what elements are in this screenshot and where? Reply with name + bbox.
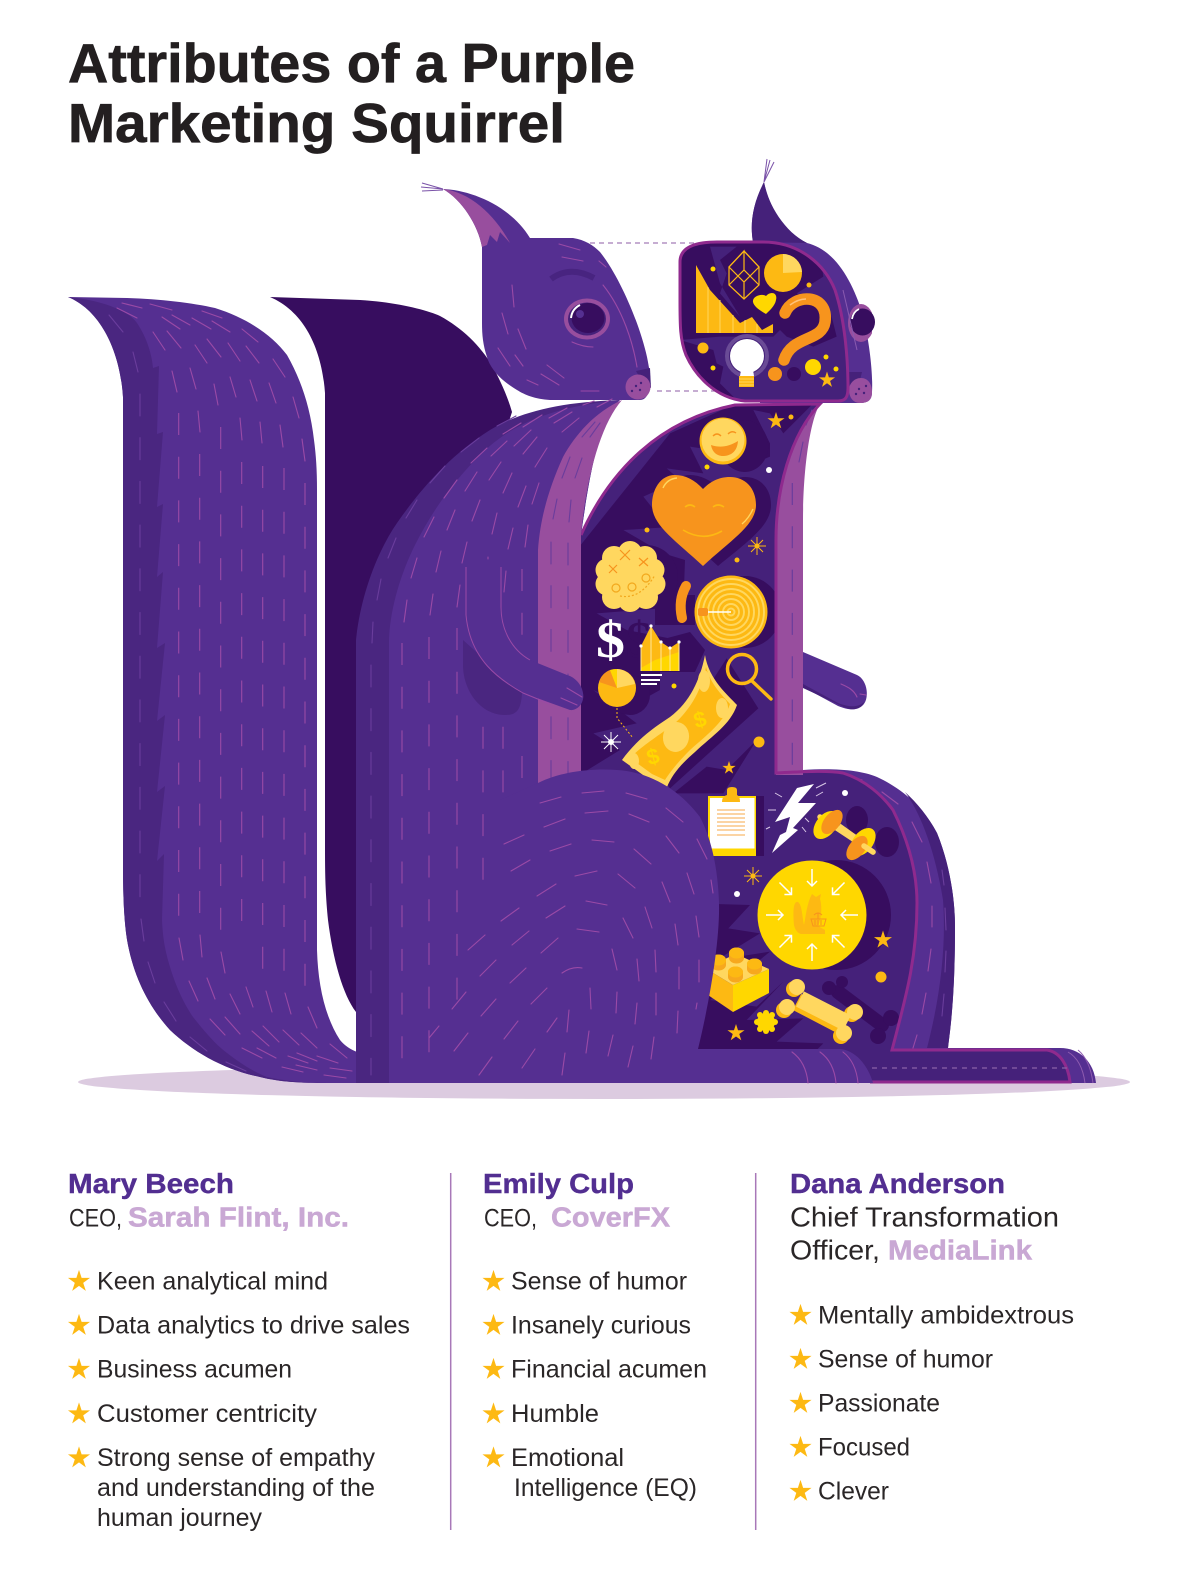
- panel: Mary Beech: Business acumen: [97, 1356, 292, 1384]
- panel: Dana Anderson: MediaLink: [888, 1234, 1032, 1266]
- panel: Mary Beech: human journey: [97, 1504, 262, 1532]
- title: Attributes of a Purple: [68, 32, 635, 94]
- left head fur: [498, 244, 637, 407]
- panel: Emily Culp: Insanely curious: [511, 1312, 691, 1340]
- icon: dumbbell: [808, 806, 881, 864]
- guide lines between heads: [590, 243, 846, 391]
- bone shadow: [838, 992, 882, 1025]
- icon: starburst: [748, 537, 766, 555]
- panel: Dana Anderson: Clever: [818, 1478, 889, 1506]
- right nose: [849, 372, 872, 403]
- interior outline: [581, 404, 1070, 1082]
- cutaway interior: neck and body: [577, 403, 1070, 1083]
- dividers: [451, 1173, 756, 1530]
- panel: Mary Beech: and understanding of the: [97, 1474, 375, 1502]
- right arm: [803, 652, 867, 709]
- back tail: [270, 297, 512, 1012]
- panel: Mary Beech: Sarah Flint, Inc.: [128, 1202, 349, 1232]
- icon: target with arrow: [681, 576, 768, 648]
- right body fur: [842, 774, 932, 1048]
- icon: small stars and dots, neck: [644, 412, 794, 774]
- icon: area chart: [696, 265, 773, 333]
- panel: Dana Anderson: Officer,: [790, 1234, 880, 1266]
- panel: Emily Culp: Intelligence (EQ): [514, 1474, 697, 1502]
- icon: mini squirrel with basket: [793, 894, 826, 934]
- icons: brain dots and stars: [698, 266, 838, 387]
- right squirrel: body shell: [803, 652, 1096, 1083]
- title: Marketing Squirrel: [68, 92, 565, 154]
- left arm: [463, 557, 583, 715]
- dumbbell shadow: [846, 806, 868, 834]
- right squirrel head: [68, 159, 1074, 1532]
- icon: dollar sign: $: [596, 612, 625, 669]
- haunch fur: [429, 791, 858, 1083]
- panel: Emily Culp: Financial acumen: [511, 1356, 707, 1384]
- icon: small pie chart: [598, 669, 636, 738]
- icon: dollar bill: $: [644, 743, 662, 770]
- heart shadow: [684, 475, 771, 566]
- right eye: [848, 304, 875, 342]
- icon: target customer circle: [758, 860, 866, 970]
- icon: playbook cookie: [596, 541, 666, 612]
- panel: Mary Beech: Customer centricity: [97, 1400, 318, 1428]
- panel: Dana Anderson: [789, 1168, 1074, 1506]
- icon: yellow flower: [754, 1010, 778, 1034]
- icon: orange heart: [652, 475, 756, 566]
- right ear: [752, 182, 807, 243]
- panel: Emily Culp: CoverFX: [551, 1202, 670, 1232]
- panel: Mary Beech: Mary Beech: [68, 1168, 234, 1199]
- panel: Mary Beech: [68, 1168, 410, 1532]
- icon: question mark: [784, 299, 825, 360]
- brain lighter regions: [680, 247, 850, 403]
- panel: Dana Anderson: Passionate: [818, 1390, 940, 1418]
- icon: lightbulb: [727, 336, 767, 387]
- title: [68, 32, 635, 154]
- panel: Dana Anderson: Chief Transformation: [790, 1202, 1059, 1232]
- icon: wireframe gem: [729, 251, 759, 299]
- chest strip: [538, 400, 622, 790]
- body fur: [404, 408, 579, 622]
- icon: bar chart: [639, 624, 681, 684]
- left eye: [564, 298, 610, 340]
- panel: Dana Anderson: Sense of humor: [818, 1346, 993, 1374]
- panel: Dana Anderson: Mentally ambidextrous: [818, 1302, 1074, 1330]
- panel: Emily Culp: Sense of humor: [511, 1268, 687, 1296]
- ground shadow: [78, 1065, 1130, 1099]
- panel: Emily Culp: Emily Culp: [483, 1168, 634, 1199]
- brain cutaway: [680, 242, 848, 401]
- icon: yellow heart: [753, 293, 776, 314]
- icon: smiley face: [700, 418, 746, 464]
- panel: Mary Beech: Strong sense of empathy: [97, 1444, 375, 1472]
- icon: white sparkle: [601, 732, 621, 752]
- tail fur: [117, 303, 352, 1078]
- icon: clipboard: [708, 787, 756, 856]
- icon: bone: [776, 979, 863, 1044]
- panel: Mary Beech: Data analytics to drive sales: [97, 1312, 410, 1340]
- left brow: [551, 272, 594, 279]
- panel: Emily Culp: Humble: [511, 1400, 599, 1428]
- icon: lego brick: [705, 948, 769, 1012]
- panel: Emily Culp: [482, 1168, 707, 1502]
- left squirrel body: [356, 400, 622, 1083]
- icon: dollar bill: $: [691, 706, 709, 733]
- front tail: [68, 297, 357, 1083]
- panel: Dana Anderson: Dana Anderson: [790, 1168, 1005, 1199]
- left nose: [626, 368, 651, 400]
- foot dashed line: [872, 1067, 1068, 1069]
- neck strip: [776, 404, 820, 775]
- panel: Mary Beech: CEO,: [69, 1204, 122, 1232]
- panel: Emily Culp: CEO,: [484, 1204, 537, 1232]
- brain outline: [680, 242, 848, 401]
- icon: magnifying glass: [728, 654, 771, 699]
- tail shade: [68, 297, 327, 1083]
- icons: lower stars and dots: [727, 790, 892, 1040]
- interior shadows: $: [626, 612, 652, 669]
- icon: lightning bolt: [766, 783, 826, 853]
- panel: Dana Anderson: Focused: [818, 1434, 910, 1462]
- left haunch and foot: [429, 770, 1093, 1083]
- icon: dollar bill: [622, 655, 737, 787]
- icon: brain pie chart: [764, 254, 802, 292]
- interior shadows: [577, 403, 899, 1050]
- right body outer shade: [905, 792, 955, 1048]
- left squirrel head: [421, 183, 651, 407]
- left ear inner: [443, 189, 510, 247]
- panel: Emily Culp: Emotional: [511, 1444, 624, 1472]
- panel: Mary Beech: Keen analytical mind: [97, 1268, 328, 1296]
